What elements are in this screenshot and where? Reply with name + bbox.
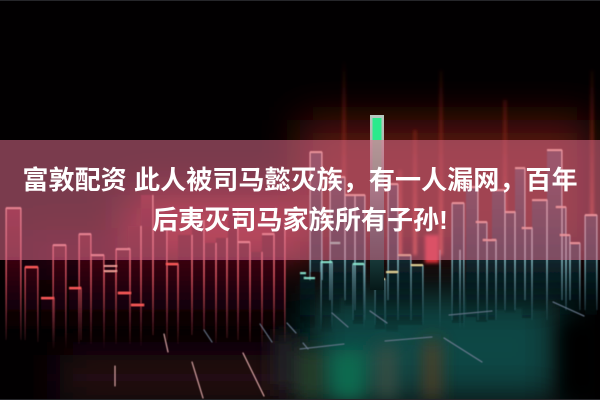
translucent title band bbox=[0, 140, 600, 260]
floor reflections bbox=[270, 320, 600, 400]
red light streaks bbox=[344, 60, 592, 255]
bars: teal cluster bbox=[300, 150, 597, 332]
title: 富敦配资 此人被司马懿灭族，有一人漏网，百年 bbox=[22, 165, 578, 195]
title: 后夷灭司马家族所有子孙! bbox=[152, 205, 448, 235]
title bbox=[22, 165, 578, 235]
background glow bbox=[20, 120, 590, 400]
bars: red cluster bbox=[6, 195, 285, 358]
bar: green highlighted bar bbox=[370, 115, 384, 290]
floor light lines bbox=[115, 302, 584, 398]
